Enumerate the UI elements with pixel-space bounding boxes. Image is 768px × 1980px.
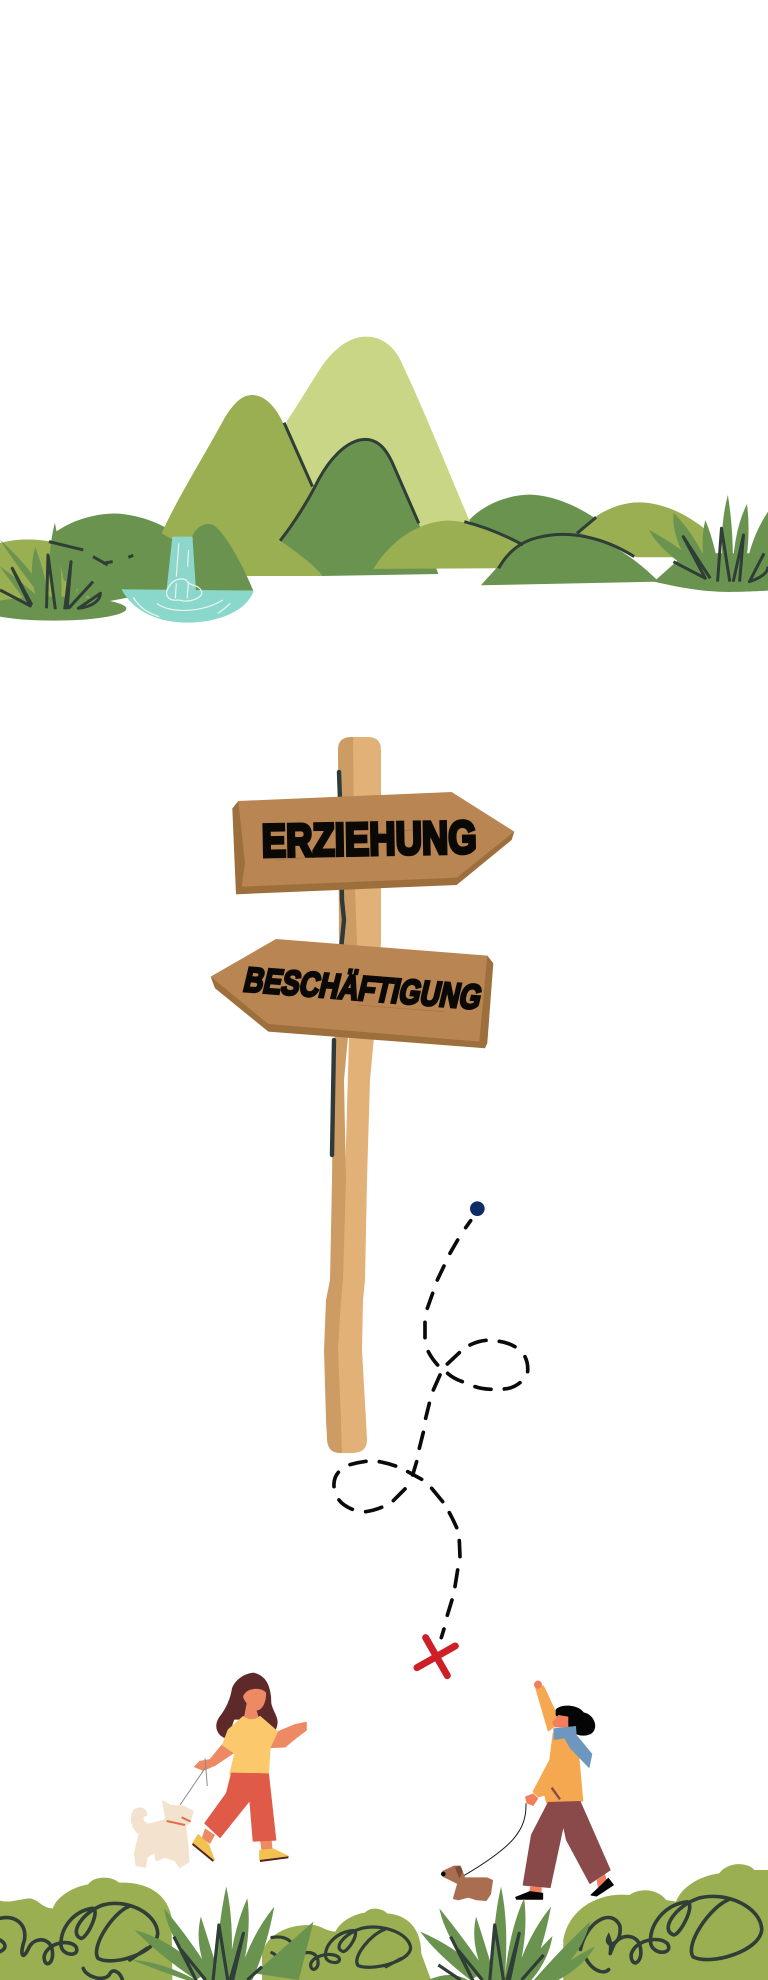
route dashes <box>334 1221 528 1638</box>
post dark edge line <box>332 772 344 1155</box>
dog collar and tongue <box>167 1817 191 1825</box>
shoes <box>516 1878 613 1899</box>
left arm <box>195 1744 233 1770</box>
middle shrub <box>262 1909 431 1980</box>
red X marker <box>417 1638 455 1676</box>
right shrub <box>563 1864 768 1980</box>
right grass clump <box>420 1887 595 1980</box>
leash <box>463 1803 526 1876</box>
dog nose <box>441 1872 446 1876</box>
landscape: mountains, waterfall and plants <box>0 337 768 623</box>
board face <box>211 939 487 1042</box>
post shaded side <box>324 737 357 1453</box>
right plant ground <box>654 553 768 592</box>
board scratch <box>357 975 443 1012</box>
left grass clump <box>132 1887 313 1980</box>
ridge line <box>280 423 419 541</box>
middle shrub scribble <box>272 1927 411 1969</box>
waterfall <box>167 537 196 590</box>
text: Beschäftigung: BESCHÄFTIGUNG <box>240 961 486 1017</box>
white dog <box>132 1802 193 1867</box>
left plant leaves <box>0 523 110 607</box>
leash <box>180 1758 207 1805</box>
start dot <box>470 1201 485 1216</box>
dashed route <box>334 1201 528 1676</box>
hair <box>557 1707 594 1735</box>
left plant scribble <box>0 542 133 609</box>
scarf <box>553 1726 592 1768</box>
pool <box>121 589 254 623</box>
far right hill <box>578 502 715 557</box>
jacket <box>533 1733 583 1803</box>
shoes <box>193 1835 288 1860</box>
sign: Erziehung board <box>232 792 514 894</box>
left grass scribble <box>174 1925 262 1980</box>
board face <box>238 792 514 887</box>
signboards <box>211 792 514 1048</box>
woman walking white dog <box>132 1674 306 1867</box>
right arm <box>270 1723 306 1747</box>
pocket <box>552 1788 560 1799</box>
hill outlines <box>464 517 634 568</box>
waterfall hill <box>192 524 253 591</box>
board scratch <box>277 829 420 860</box>
hair <box>218 1674 276 1737</box>
left shrub <box>0 1878 172 1980</box>
trousers <box>205 1773 276 1841</box>
back left hill <box>0 540 103 603</box>
left shrub scribble <box>0 1903 158 1980</box>
right plant scribble <box>673 528 768 582</box>
bottom shrubs <box>0 1864 768 1980</box>
back right hill <box>469 495 595 560</box>
brown dog ear <box>455 1866 463 1878</box>
trousers <box>523 1802 610 1887</box>
water ripples and foam <box>133 543 230 617</box>
right plant leaves <box>649 495 768 583</box>
right shrub scribble <box>580 1896 762 1972</box>
board shadow <box>232 801 514 894</box>
shirt <box>223 1717 277 1774</box>
light mountain <box>287 337 469 553</box>
raised arm <box>536 1686 556 1731</box>
board shadow <box>211 956 493 1048</box>
brown dog <box>443 1867 492 1900</box>
front light hill <box>373 521 524 569</box>
left plant ground <box>0 597 126 621</box>
front dark hill <box>481 534 659 585</box>
face <box>552 1715 568 1727</box>
text: Erziehung: ERZIEHUNG <box>261 811 477 867</box>
woman walking brown dog <box>441 1681 613 1900</box>
dark centre mountain <box>280 439 438 576</box>
raised hand <box>534 1681 542 1689</box>
neck and face <box>243 1689 266 1721</box>
back left dark hill <box>54 514 186 603</box>
middle mountain <box>162 395 322 576</box>
front hand <box>525 1793 538 1806</box>
signpost <box>324 737 381 1453</box>
sign: Beschäftigung board <box>211 939 493 1048</box>
lower legs <box>202 1828 273 1851</box>
shoe soles <box>193 1844 288 1861</box>
feet <box>529 1874 607 1893</box>
right grass scribble <box>438 1925 544 1980</box>
post lit side <box>338 737 381 1453</box>
